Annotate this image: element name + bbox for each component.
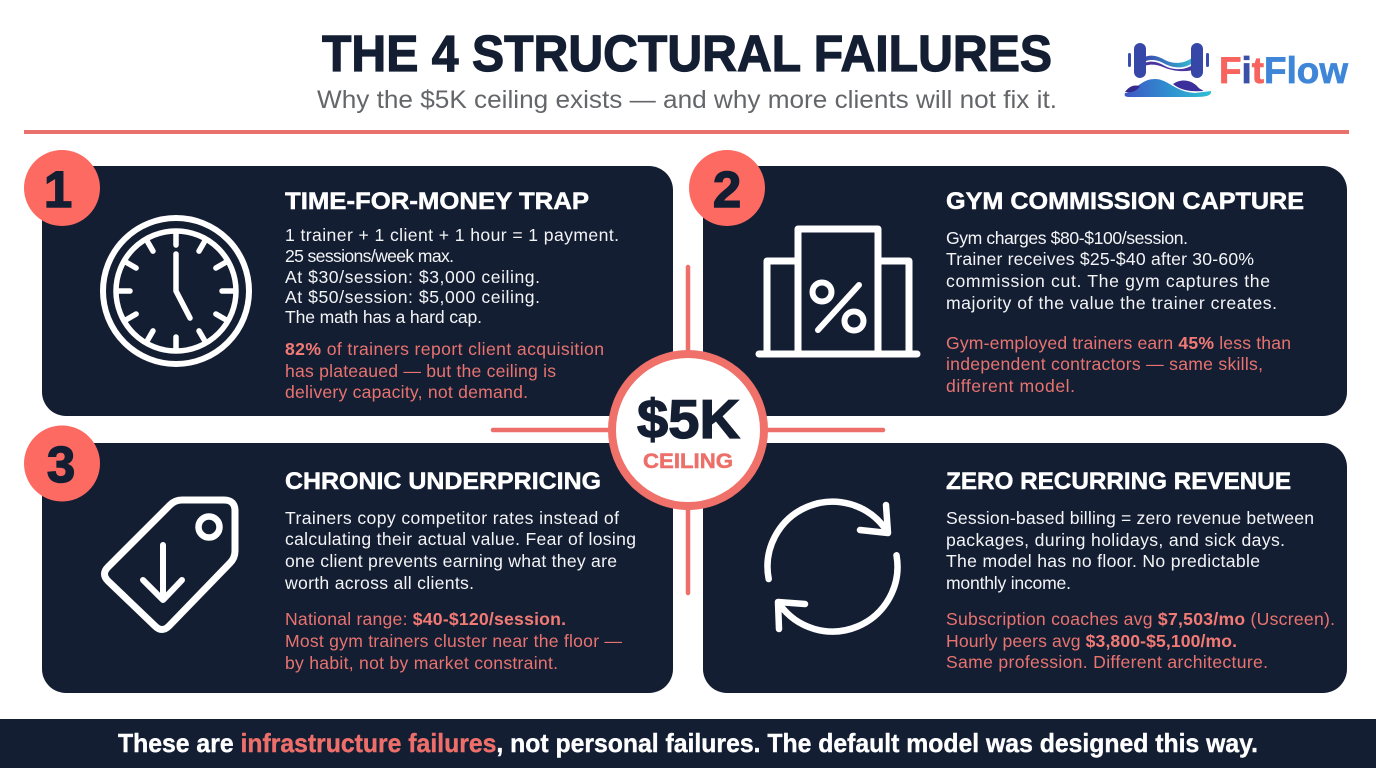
highlight text: Most gym trainers cluster near the floor —: [285, 631, 622, 651]
number badge 1: 1: [44, 161, 72, 218]
highlight text: delivery capacity, not demand.: [285, 382, 528, 402]
body text: Gym charges $80-$100/session.: [946, 228, 1188, 248]
highlight text: has plateaued — but the ceiling is: [285, 361, 556, 381]
body text: Trainer receives $25-$40 after 30-60%: [946, 249, 1254, 269]
highlight text: [285, 339, 604, 402]
icon: circular arrows: [768, 502, 897, 632]
highlight text: different model.: [946, 376, 1075, 396]
body text: [284, 508, 636, 593]
heading: CHRONIC UNDERPRICING: [285, 468, 601, 495]
body text: 1 trainer + 1 client + 1 hour = 1 payment.: [285, 225, 619, 245]
center badge: $5K ceiling: [612, 354, 764, 506]
panel: time-for-money trap: [42, 166, 673, 416]
center badge: $5K ceiling: CEILING: [643, 449, 733, 473]
body text: commission cut. The gym captures the: [946, 271, 1270, 291]
icon: clock: [103, 218, 249, 364]
highlight text: by habit, not by market constraint.: [285, 653, 558, 673]
highlight text: independent contractors — same skills,: [946, 354, 1263, 374]
footer banner: These are infrastructure failures, not personal failures. The default model was designed this way.: [118, 728, 1258, 758]
body text: majority of the value the trainer creates.: [946, 293, 1277, 313]
body text: Trainers copy competitor rates instead of: [285, 508, 619, 528]
subtitle: Why the $5K ceiling exists — and why more clients will not fix it.: [317, 86, 1057, 114]
number badge 1: [24, 150, 100, 226]
highlight text: [946, 609, 1335, 672]
number badge 3: [24, 426, 100, 502]
highlight text: [285, 609, 622, 673]
logo: FitFlow: [1125, 43, 1348, 97]
body text: worth across all clients.: [284, 573, 474, 593]
highlight text: 82% of trainers report client acquisition: [285, 339, 604, 359]
number badge 2: 2: [713, 161, 741, 218]
number badge 2: [689, 150, 765, 226]
panel: gym commission capture: [703, 166, 1347, 416]
body text: one client prevents earning what they are: [285, 551, 617, 571]
body text: At $30/session: $3,000 ceiling.: [285, 267, 540, 287]
highlight text: Hourly peers avg $3,800-$5,100/mo.: [946, 631, 1237, 651]
body text: The model has no floor. No predictable: [946, 551, 1260, 571]
body text: Session-based billing = zero revenue between: [946, 508, 1314, 528]
body text: [946, 228, 1277, 313]
highlight text: [946, 333, 1291, 396]
center badge: $5K ceiling: $5K: [637, 388, 740, 450]
highlight text: Gym-employed trainers earn 45% less than: [946, 333, 1291, 353]
body text: [946, 508, 1314, 593]
body text: calculating their actual value. Fear of losing: [285, 529, 636, 549]
highlight text: National range: $40-$120/session.: [285, 609, 566, 629]
body text: At $50/session: $5,000 ceiling.: [285, 287, 540, 307]
icon: gym building with percent: [759, 229, 917, 354]
body text: [285, 225, 619, 327]
icon: price tag with down arrow: [104, 500, 235, 630]
panel: chronic underpricing: [42, 443, 673, 693]
body text: 25 sessions/week max.: [285, 246, 454, 266]
body text: packages, during holidays, and sick days.: [946, 530, 1285, 550]
highlight text: Same profession. Different architecture.: [946, 652, 1268, 672]
heading: ZERO RECURRING REVENUE: [946, 468, 1291, 495]
white cross gap with connector lines: [470, 240, 910, 620]
body text: The math has a hard cap.: [285, 307, 482, 327]
title: THE 4 STRUCTURAL FAILURES: [322, 25, 1052, 82]
heading: GYM COMMISSION CAPTURE: [946, 188, 1304, 215]
logo: FitFlow: FitFlow: [1219, 50, 1348, 91]
highlight text: Subscription coaches avg $7,503/mo (Uscreen).: [946, 609, 1335, 629]
panel: zero recurring revenue: [703, 443, 1347, 693]
heading: TIME-FOR-MONEY TRAP: [285, 188, 589, 215]
number badge 3: 3: [47, 436, 75, 493]
footer banner: [0, 719, 1376, 768]
body text: monthly income.: [946, 573, 1071, 593]
